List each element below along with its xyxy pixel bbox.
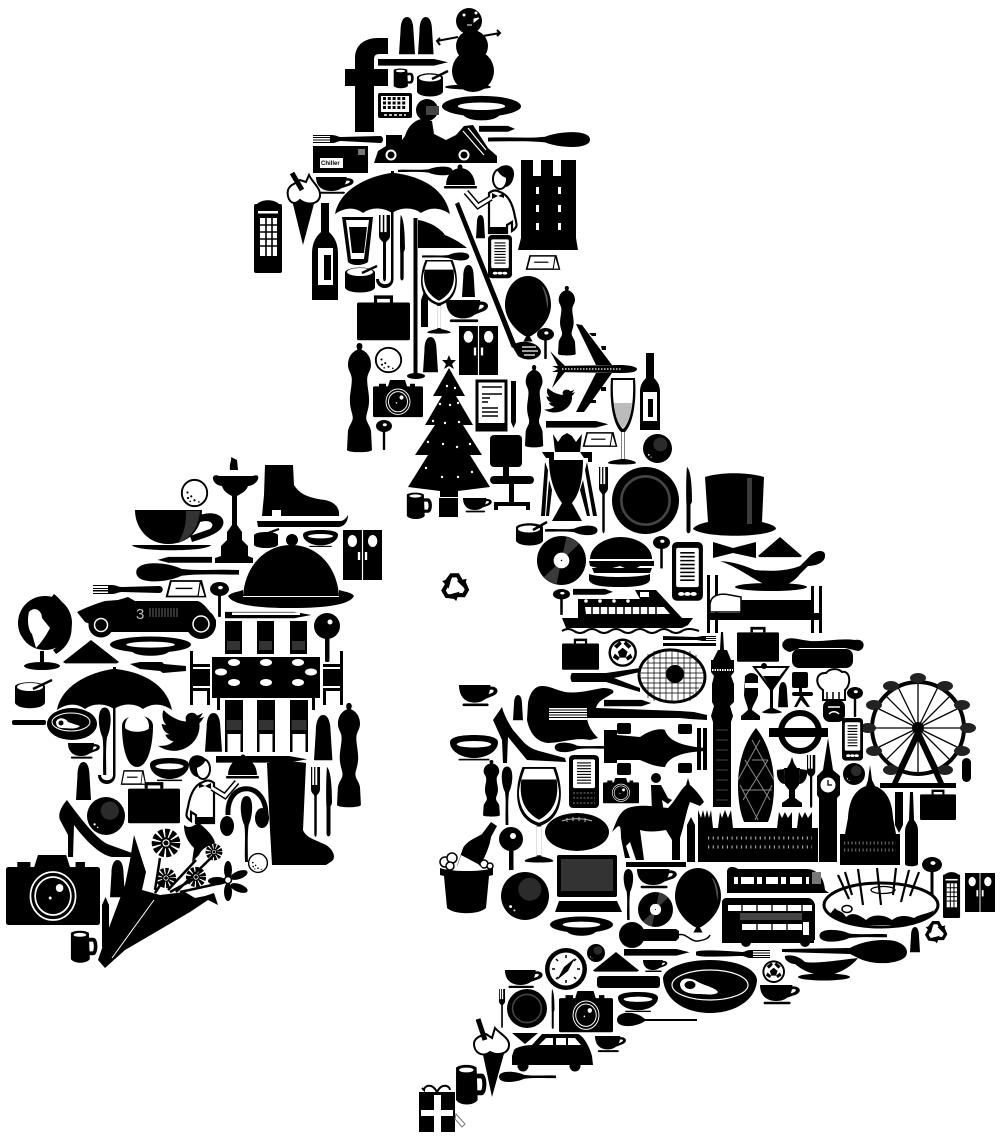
icon: snowman <box>437 8 500 92</box>
icon: compass <box>545 948 587 990</box>
icon: spoon <box>820 930 887 942</box>
icon: golf trophy <box>213 457 258 563</box>
icon: pencil <box>378 59 448 66</box>
icon: laptop <box>555 855 622 912</box>
icon: briefcase <box>737 627 779 662</box>
icon: pencil <box>573 589 613 595</box>
icon: tennis racket <box>570 647 707 705</box>
icon: big ben <box>817 738 840 862</box>
icon: black ball <box>643 434 672 463</box>
icon: coffee cup <box>760 985 800 1004</box>
icon: coffee cup <box>643 960 667 972</box>
icon: bowl <box>450 735 498 760</box>
icon: tumbler glass <box>122 714 153 767</box>
icon: briefcase <box>357 295 410 340</box>
icon: ice cream cone <box>288 173 320 245</box>
icon: lollipop pin <box>553 589 570 615</box>
icon: envelope <box>313 146 368 173</box>
icon: plate <box>550 916 613 936</box>
icon: pencil <box>158 557 212 563</box>
icon: houses of parliament <box>698 810 818 862</box>
icon: tumbler glass <box>342 217 373 265</box>
icon: office chair <box>490 435 534 510</box>
icon: frying pan with egg <box>663 960 757 1013</box>
icon: dinner plate <box>507 989 547 1028</box>
icon: lollipop pin <box>210 582 229 617</box>
icon: FA cup trophy <box>777 757 807 807</box>
icon: briefcase <box>128 782 180 823</box>
icon: smartphone <box>672 542 703 601</box>
icon: champagne flute <box>608 378 636 464</box>
icon: coffee cup <box>459 685 498 706</box>
icon: shaker <box>476 215 485 238</box>
icon: pepper mill <box>558 286 576 355</box>
icon: place card <box>122 771 146 784</box>
icon: lollipop pin <box>537 328 554 359</box>
icon: large spoon <box>136 563 239 581</box>
icon: silver cloche <box>228 534 354 608</box>
icon: pot <box>254 529 279 548</box>
icon: bed <box>707 575 822 633</box>
icon: fork <box>313 135 383 143</box>
icon: wine bottle <box>640 353 660 430</box>
icon: vintage car: 3 <box>136 606 144 623</box>
icon: vinyl record <box>537 536 586 585</box>
icon: balloon <box>505 276 551 342</box>
icon: rugby ball <box>545 813 609 851</box>
icon: london taxi <box>512 1034 593 1072</box>
icon: lollipop pin <box>314 613 340 662</box>
icon: vintage car <box>77 597 216 639</box>
icon: spoon <box>422 253 469 260</box>
icon: gherkin tower <box>738 728 774 822</box>
icon: shaker <box>314 715 332 760</box>
region: England and Wales icons <box>419 522 995 1132</box>
icon: dinner plate <box>612 467 679 534</box>
icon: black ball <box>587 944 605 962</box>
icon: shakers <box>76 762 91 800</box>
icon: waiter with cloche <box>444 164 517 234</box>
icon: black ball <box>501 872 549 920</box>
icon: premier league trophy <box>541 433 597 521</box>
icon: pencil <box>511 381 516 428</box>
icon: wine glass <box>421 260 457 334</box>
icon: horse and rider statue <box>612 773 704 867</box>
icon: coffee cup <box>446 300 488 322</box>
icon: coffee cup <box>637 869 677 888</box>
icon: umbrella <box>57 667 172 784</box>
icon: pin <box>962 758 971 782</box>
icon: fork <box>696 950 770 958</box>
icon: lollipop pin <box>653 536 670 568</box>
icon: twitter bird <box>158 710 204 751</box>
icon: smartphone <box>842 718 863 761</box>
icon: mug <box>394 68 414 88</box>
icon: fork <box>499 989 505 1028</box>
icon: knife <box>400 215 405 280</box>
icon: waiter with cloche <box>186 754 259 824</box>
icon: camera <box>6 855 100 925</box>
icon: black ball <box>843 763 865 785</box>
icon: pepper mill <box>483 760 500 817</box>
region: Ireland icons <box>6 457 382 968</box>
icon: soup plate <box>442 96 521 120</box>
icon: river boat <box>562 590 699 633</box>
icon: ferris wheel <box>860 673 976 788</box>
icon: dining table with chairs <box>190 621 343 752</box>
icon: spoon <box>545 526 598 535</box>
icon: pencil <box>624 949 690 956</box>
icon: high heel shoe <box>493 707 566 763</box>
icon: hamburger <box>589 537 654 587</box>
icon: balloon <box>675 868 721 932</box>
icon: football <box>762 960 785 983</box>
icon: pencil <box>687 817 695 862</box>
icon: lollipop pin <box>847 687 863 717</box>
icon: smartphone <box>488 235 512 278</box>
icon: saucepan <box>417 71 448 96</box>
icon: golf ball <box>182 480 207 506</box>
icon: knife <box>552 989 554 1029</box>
icon: shaker <box>423 337 438 372</box>
icon: camera <box>373 380 423 417</box>
icon: train <box>727 867 829 893</box>
icon: calculator <box>378 93 412 118</box>
icon: lollipop pin <box>922 857 942 895</box>
icon: cylinder bar <box>597 976 660 988</box>
icon: napkin triangle <box>512 1033 538 1044</box>
icon: soup plate <box>110 636 191 656</box>
icon: knife <box>686 467 692 533</box>
icon: double doors <box>965 873 995 912</box>
icon: spoon with cord <box>619 922 710 948</box>
icon: camera <box>559 991 613 1032</box>
icon: pencil <box>102 897 109 947</box>
icon: fork <box>379 215 390 281</box>
icon: umbrella <box>335 171 450 288</box>
icon: mug <box>71 931 97 963</box>
icon: high heel shoe <box>59 800 132 857</box>
icon: chair <box>792 672 813 707</box>
icon: shaker <box>778 682 788 707</box>
icon: bow tie <box>713 542 756 558</box>
icon: pencil <box>604 700 651 706</box>
icon: golf flag <box>407 218 467 379</box>
icon: pencil <box>225 612 311 618</box>
icon: napkin triangle <box>758 537 802 557</box>
icon: BT tower <box>711 632 734 807</box>
icon: pencil <box>479 126 515 132</box>
icon: golf ball <box>249 854 267 872</box>
icon: lollipop pin <box>376 420 392 450</box>
icon: castle <box>518 160 578 250</box>
icon: spoon <box>398 167 453 175</box>
icon: large spoon <box>782 940 907 963</box>
icon: shaker <box>513 695 523 720</box>
icon: menu <box>477 381 506 431</box>
icon: cup <box>316 177 354 194</box>
icon: recycling symbol <box>923 923 948 945</box>
icon: frying pan <box>12 708 97 740</box>
icon: pen <box>130 662 186 673</box>
icon: flower bouquet <box>98 823 249 968</box>
icon: shaker <box>205 713 222 752</box>
icon: double doors <box>459 326 498 375</box>
icon: spoon <box>241 796 252 862</box>
icon: formula one car <box>604 723 707 775</box>
icon: double doors <box>343 530 382 580</box>
icon: salt and pepper shakers <box>399 17 434 54</box>
icon: large spoon <box>488 132 590 147</box>
icon: shaker <box>110 860 125 897</box>
icon: electric guitar <box>527 686 707 743</box>
icon: globe <box>18 594 72 670</box>
icon: saucepan <box>345 266 377 292</box>
icon: spoon <box>617 1013 697 1026</box>
icon: recycling symbol <box>439 575 470 603</box>
icon: ice skate <box>257 465 348 527</box>
icon: pepper mill <box>347 343 372 452</box>
icon: knife <box>326 767 332 836</box>
icon: place card <box>527 256 559 269</box>
icon: wine bottle <box>312 203 338 300</box>
icon: spoon <box>624 869 633 920</box>
icon: coffee cup <box>505 970 543 988</box>
region: Scotland icons <box>254 8 776 536</box>
icon: camera <box>603 778 639 803</box>
icon: aeroplane <box>550 324 637 412</box>
icon: mug <box>407 493 432 519</box>
icon: napkin triangle <box>63 640 119 663</box>
icon: fork <box>807 755 815 808</box>
icon: coffee cup <box>463 498 492 512</box>
icon: pepper mill <box>337 703 361 807</box>
icon: champagne bucket <box>440 822 497 913</box>
icon: pencil <box>421 290 428 327</box>
icon: briefcase <box>920 790 956 820</box>
icon: gravy boat <box>785 955 858 980</box>
icon: coffee cup <box>68 743 100 759</box>
icon: O2 dome <box>824 868 938 927</box>
icon: double decker bus <box>722 898 815 947</box>
icon: pencil <box>216 756 307 763</box>
icon: compact disc <box>638 892 673 927</box>
icon: twitter bird <box>544 388 575 412</box>
icon: bowl <box>303 530 338 547</box>
icon: gravy boat <box>720 551 825 591</box>
icon: go kart <box>374 99 497 163</box>
icon: wellington boot <box>267 762 334 865</box>
icon: phone box <box>254 200 282 273</box>
icon: spoon <box>502 766 512 825</box>
icon: wine glass <box>517 767 561 863</box>
icon: underground roundel <box>769 713 828 751</box>
icon: St Paul's cathedral <box>840 765 900 865</box>
icon: fork <box>311 767 320 837</box>
icon: lollipop pin <box>499 827 523 870</box>
icon: top hat <box>693 473 776 536</box>
icon: large tea cup <box>132 510 223 550</box>
icon: shaker <box>910 927 920 952</box>
icon: cricket bat <box>905 792 918 866</box>
icon: hot dog <box>782 638 864 668</box>
icon: envelope: Chiller <box>321 161 340 167</box>
icon: golf club <box>455 202 541 359</box>
icon: pepper mill <box>525 365 543 447</box>
icon: saucepan <box>516 522 547 546</box>
icon: fork and knife <box>663 636 716 646</box>
icon: place card <box>167 581 205 596</box>
icon: facebook f <box>345 38 388 132</box>
icon: pencil <box>895 792 903 833</box>
icon: place card <box>584 433 616 446</box>
icon: headphones <box>220 789 269 836</box>
icon: briefcase <box>562 639 599 670</box>
icon: spoon <box>499 1072 556 1082</box>
icon: black ball <box>87 797 125 835</box>
icon: bowl <box>150 758 189 781</box>
icon: phone box <box>943 872 960 918</box>
icon: cocktail glass <box>752 663 790 714</box>
icon: chef <box>817 669 849 722</box>
icon: mug <box>456 1065 486 1104</box>
icon: christmas tree <box>408 355 490 517</box>
icon: ice cream cone <box>474 1019 509 1097</box>
icon: spoon <box>99 708 111 775</box>
icon: saucepan <box>15 680 52 708</box>
icon: bowl <box>618 992 658 1012</box>
icon: golf ball <box>376 348 401 372</box>
icon: football <box>608 638 637 667</box>
icon: spoon <box>555 743 605 752</box>
icon: gift box <box>419 1086 465 1132</box>
icon: fork <box>93 585 163 594</box>
icon: coffee cup <box>595 1036 626 1052</box>
icon: shaker <box>462 265 475 297</box>
icon: smartphone <box>569 755 599 808</box>
icon: fork <box>599 467 608 533</box>
icon: pencil <box>546 421 608 428</box>
icon: napkin triangle <box>593 952 639 972</box>
icon: ascot trophy <box>741 673 760 720</box>
